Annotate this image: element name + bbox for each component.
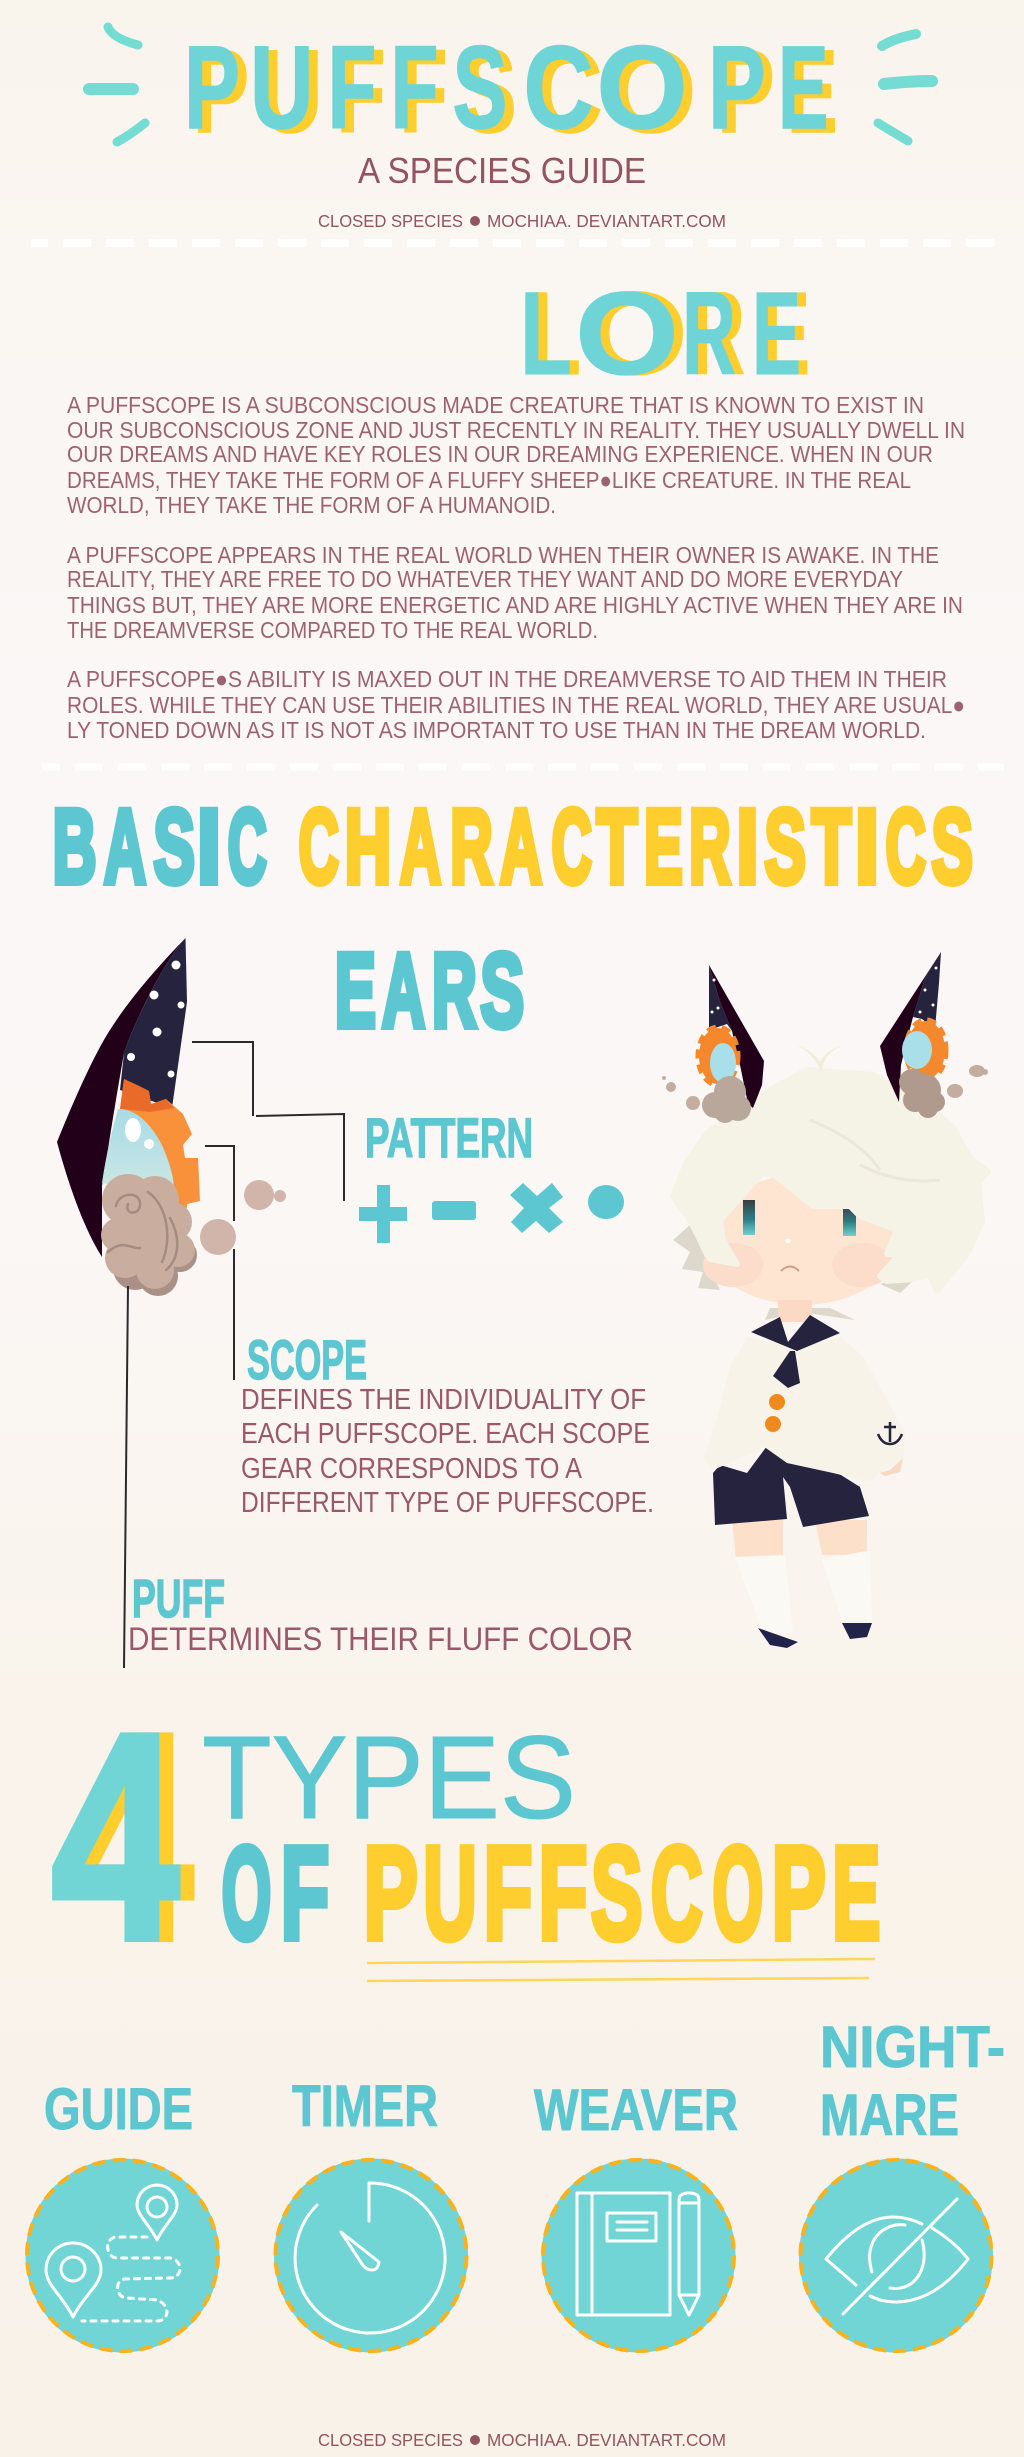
heading: basic characteristics: A [400,788,441,906]
decorative burst right [878,34,932,141]
scope label and description [241,1328,654,1519]
type: timer: TIMER [292,2074,438,2139]
title: F [328,22,376,154]
heading: basic characteristics: C [228,788,267,906]
numeral 4: 4 [51,1672,181,2003]
lore paragraph 1 [67,392,965,518]
shorts [713,1446,869,1527]
icon: timer [274,2158,468,2352]
ears heading: E [335,932,376,1050]
type: guide: GUIDE [44,2077,193,2142]
lore paragraph 1: OUR SUBCONSCIOUS ZONE AND JUST RECENTLY IN REALITY. THEY USUALLY DWELL IN [67,417,965,443]
connector: scope [205,1146,234,1380]
lore paragraph 3: LY TONED DOWN AS IT IS NOT AS IMPORTANT TO USE THAN IN THE DREAM WORLD. [67,717,926,743]
lore heading [520,268,810,400]
header [89,22,932,231]
credit line: MOCHIAA. DEVIANTART.COM [487,211,726,231]
title: U [250,22,314,154]
anchor [878,1422,902,1444]
dot [588,1185,624,1219]
lore heading: E [761,268,810,400]
heading: basic characteristics: T [812,788,851,906]
title: U [259,26,322,158]
title: F [400,26,448,158]
lore paragraph 1: OUR DREAMS AND HAVE KEY ROLES IN OUR DREAMING EXPERIENCE. WHEN IN OUR [67,441,933,467]
lore heading: L [520,268,572,400]
title: S [452,22,508,154]
cross [510,1183,563,1233]
heading: basic characteristics: A [500,788,542,906]
heading: basic characteristics: R [689,788,731,906]
puffscope: P [364,1820,418,1966]
face [705,1175,899,1305]
puff [113,1238,197,1296]
ear shell [57,938,186,1257]
title: C [532,26,602,158]
heading: basic characteristics: R [450,788,493,906]
scope label and description: SCOPE [247,1328,367,1391]
puffscope: S [591,1820,643,1966]
heading: basic characteristics: S [154,788,195,906]
lore heading: L [529,268,581,400]
credit line: CLOSED SPECIES [318,211,463,231]
icon: notebook and pencil [542,2158,736,2352]
heading: basic characteristics: I [197,788,221,906]
heading: basic characteristics: C [299,788,339,906]
left character ear [662,965,764,1123]
title: O [596,22,688,154]
footer credit [318,2430,726,2450]
title: E [787,26,838,158]
pattern label: PATTERN [365,1106,533,1169]
title: C [524,22,594,154]
legs [732,1520,867,1560]
underlines [367,1959,875,1981]
neck [778,1300,812,1322]
mouth and nose [781,1266,799,1271]
puffscope: C [651,1820,703,1966]
heading: basic characteristics: A [104,788,146,906]
ear pattern panel [120,938,187,1108]
floating puffs [200,1180,286,1255]
lore paragraph 2: REALITY, THEY ARE FREE TO DO WHATEVER THEY WANT AND DO MORE EVERYDAY [67,566,903,592]
plus [359,1185,407,1243]
heading: basic characteristics: I [855,788,879,906]
title: F [390,22,438,154]
title: O [606,26,696,158]
heading: basic characteristics: C [552,788,592,906]
sailor collar and tie [751,1315,840,1388]
lore heading: O [584,268,688,400]
lore paragraph 1: DREAMS, THEY TAKE THE FORM OF A FLUFFY SHEEP●LIKE CREATURE. IN THE REAL [67,467,911,493]
lore paragraph 1: A PUFFSCOPE IS A SUBCONSCIOUS MADE CREATURE THAT IS KNOWN TO EXIST IN [67,392,924,418]
character illustration [662,952,988,1648]
lore paragraph 3 [67,666,965,743]
scope label and description: EACH PUFFSCOPE. EACH SCOPE [241,1418,650,1450]
icon: map route [26,2158,220,2352]
shoes [758,1623,872,1648]
type: timer [274,2074,468,2352]
title: F [336,26,386,158]
footer credit: CLOSED SPECIES [318,2430,463,2450]
decorative burst left [89,27,145,142]
icon: crossed eye [799,2158,993,2352]
lore paragraph 1: WORLD, THEY TAKE THE FORM OF A HUMANOID. [67,492,556,518]
puffscope: P [772,1820,826,1966]
right character ear [880,952,988,1118]
footer credit: MOCHIAA. DEVIANTART.COM [487,2430,726,2450]
puff label and description [128,1569,633,1657]
heading: basic characteristics: E [644,788,683,906]
title: S [462,26,516,158]
heading: basic characteristics: H [345,788,391,906]
socks [735,1550,872,1633]
lore heading: O [575,268,679,400]
title: P [708,22,766,154]
type: weaver [534,2078,738,2352]
lore paragraph 3: A PUFFSCOPE●S ABILITY IS MAXED OUT IN THE DREAMVERSE TO AID THEM IN THEIR [67,666,947,692]
lore paragraph 2: THE DREAMVERSE COMPARED TO THE REAL WORLD. [67,617,598,643]
scope label and description: DIFFERENT TYPE OF PUFFSCOPE. [241,1487,654,1519]
ears heading: A [382,932,425,1050]
ears heading: R [432,932,477,1050]
of: F [281,1820,329,1966]
heading: basic characteristics: I [736,788,758,906]
type: weaver: WEAVER [534,2078,738,2143]
ears heading: S [480,932,524,1050]
scope gear [120,1079,200,1216]
scope label and description: GEAR CORRESPONDS TO A [241,1453,583,1485]
lore paragraph 2: A PUFFSCOPE APPEARS IN THE REAL WORLD WHEN THEIR OWNER IS AWAKE. IN THE [67,542,939,568]
puff label and description: PUFF [132,1569,225,1629]
heading: basic characteristics: C [886,788,926,906]
credit line [318,211,726,231]
subtitle: A SPECIES GUIDE [358,150,646,191]
scope label and description: DEFINES THE INDIVIDUALITY OF [241,1384,646,1416]
numeral 4: 4 [65,1672,195,2003]
minus [432,1201,476,1220]
eyes [743,1200,755,1235]
section: lore [67,268,965,743]
connector: pattern [192,1042,344,1201]
heading: basic characteristics: B [53,788,96,906]
heading: basic characteristics: S [764,788,806,906]
puff label and description: DETERMINES THEIR FLUFF COLOR [128,1621,633,1657]
title: P [184,22,240,154]
scope lens [102,1109,174,1196]
puffscope: U [423,1820,477,1966]
title [184,22,838,158]
type: nightmare: NIGHT- [820,2015,1005,2080]
pattern symbols [359,1183,624,1243]
lore paragraph 2 [67,542,963,643]
puffscope: F [539,1820,587,1966]
heading: basic characteristics: T [597,788,637,906]
title: P [717,26,775,158]
type: nightmare [799,2015,1005,2352]
title: P [193,26,249,158]
buttons [765,1394,785,1432]
lore heading: R [691,268,745,400]
lore heading: E [752,268,801,400]
section heading: 4 types of puffscope [51,1672,880,2003]
heading: basic characteristics: S [932,788,973,906]
puffscope: F [484,1820,532,1966]
of: O [222,1820,272,1966]
connector: puff [124,1286,128,1668]
large ear illustration [57,938,286,1296]
pattern dots [127,960,184,1078]
lore heading: R [682,268,736,400]
puffscope: E [832,1820,880,1966]
sweater [703,1337,905,1482]
types: TYPES [202,1712,576,1844]
type: nightmare: MARE [820,2083,959,2148]
heading: basic characteristics [53,788,973,906]
title: E [778,22,829,154]
type: guide [26,2077,220,2352]
puffscope: O [712,1820,763,1966]
hair [673,1070,988,1291]
back hair [673,1225,925,1320]
